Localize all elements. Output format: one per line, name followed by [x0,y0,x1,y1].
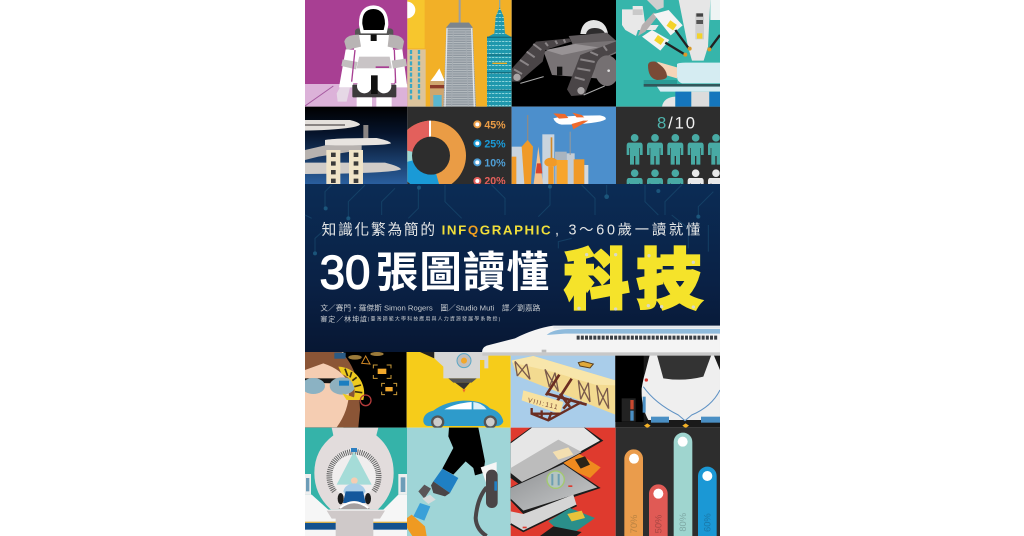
bar: 60%: 60% [703,513,713,532]
tile: tracked robot [512,0,619,107]
8/10 label: 8/10 [657,113,695,132]
reviewer: 審定／林坤誼 [320,314,367,323]
tile: surgical robot [616,0,720,107]
main title: 張圖讀懂 [376,249,549,297]
subtitle: 知識化繁為簡的 [322,220,435,238]
tile: airplane over city [512,107,616,184]
tile: donut chart: 20% [484,176,506,188]
tile: biplane: VIII:111 [527,397,559,411]
tile: exploded phone [511,428,616,536]
tile: 3D printer car [407,352,511,429]
bar: 50%: 50% [654,515,664,533]
tile: donut chart: 10% [484,157,506,169]
bar: 70%: 70% [629,515,639,533]
subject title: 科技 [564,243,702,316]
subtitle ages: , 3～60歲一讀就懂 [555,221,700,238]
tile: biplane [511,352,615,428]
tile: bar chart [616,428,720,536]
tile: donut chart: 45% [484,119,506,131]
bottom image rows [302,352,720,536]
bar: 80%: 80% [678,513,688,532]
bullet train [482,326,720,356]
tile: 8/10 people [616,106,720,184]
reviewer affiliation: (臺灣師範大學科技應用與人力資源發展學系教授) [368,315,501,322]
tile: maglev trains [305,107,407,184]
credits: 文／賽門‧羅傑斯 Simon Rogers 圖／Studio Muti 譯／劉嘉路 [320,304,541,313]
tile: donut chart [407,106,512,184]
tile: CT scanner [305,428,407,536]
main title [320,247,549,300]
top image rows [305,0,724,200]
main title: 30 [320,247,370,300]
tile: prosthetic legs [407,428,511,536]
tile: smart glasses woman [302,352,407,428]
tile: skyscrapers [399,0,512,107]
title banner [305,184,720,352]
tile: humanoid robot [305,0,407,107]
tile: donut chart: 25% [484,138,506,150]
tile: train front [615,352,720,428]
book cover [304,0,720,536]
INFOGRAPHIC wordmark: INFQGRAPHIC [442,223,551,238]
